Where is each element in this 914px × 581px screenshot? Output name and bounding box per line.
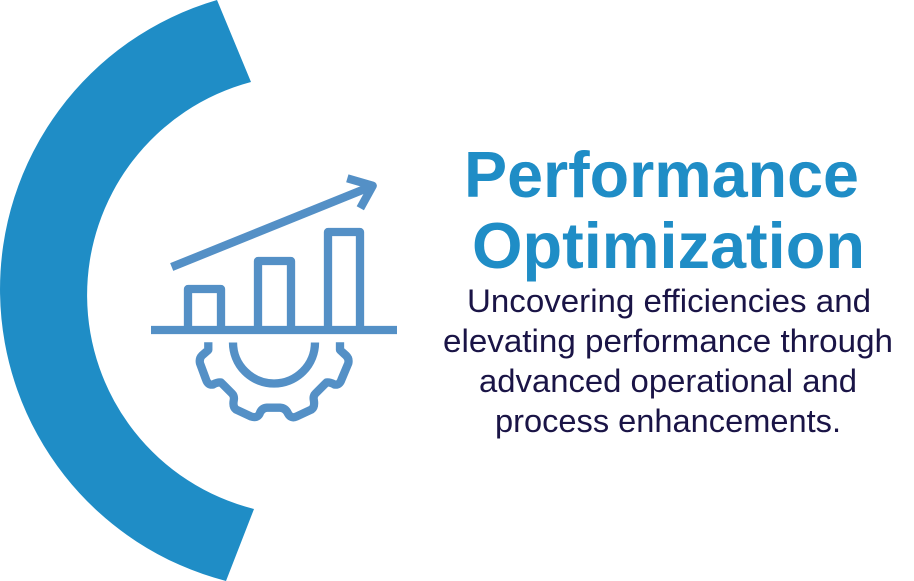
decorative blue arc [0,0,254,581]
icon: bar chart with rising arrow over gear [151,178,397,417]
rising arrow [172,178,373,267]
gear outline [200,342,349,417]
description line 3: advanced operational and [479,363,857,399]
bar 3 [328,232,360,328]
description text [443,283,893,439]
bar 1 [188,289,221,328]
bar 2 [258,261,291,328]
description line 2: elevating performance through [443,323,893,359]
title [464,138,865,282]
chart baseline [151,326,397,334]
title line 1: Performance [464,138,859,211]
description line 1: Uncovering efficiencies and [467,283,871,319]
description line 4: process enhancements. [495,403,841,439]
title line 2: Optimization [472,209,865,282]
gear inner arc [233,342,315,384]
